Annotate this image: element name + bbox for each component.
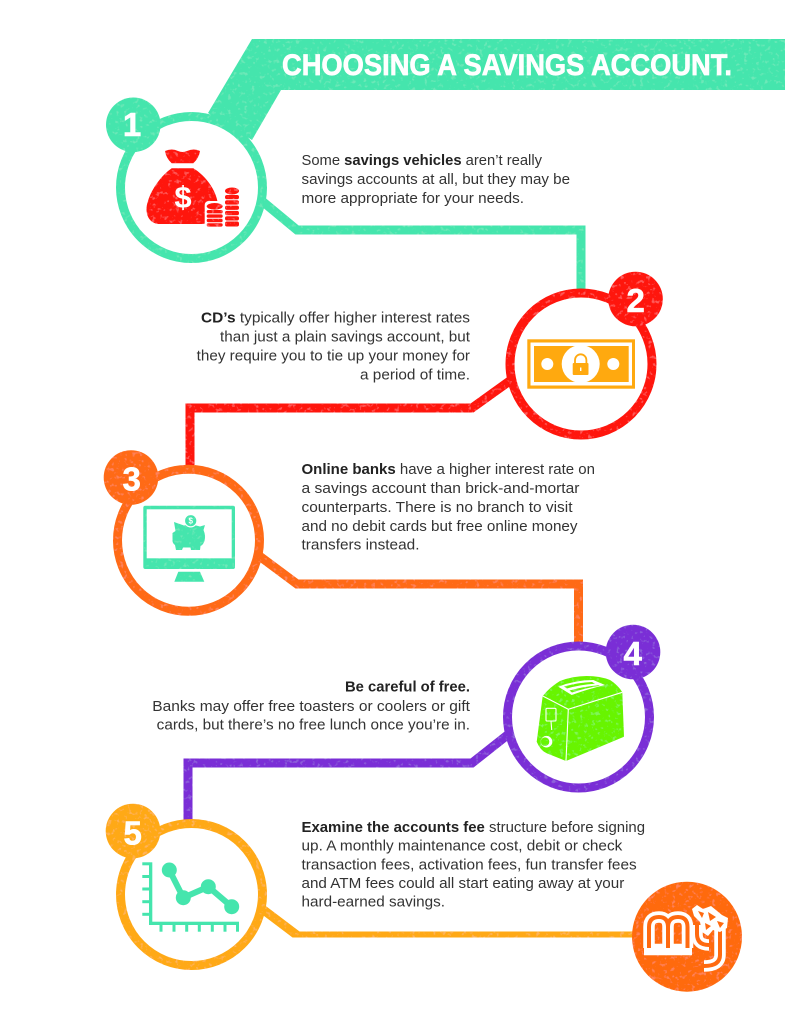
text: step 3: and no debit cards but free online money bbox=[302, 519, 578, 535]
icon: monitor with piggy bank: $ bbox=[188, 516, 193, 526]
text: step 2: they require you to tie up your money for bbox=[197, 348, 470, 364]
step 5 ring and badge bbox=[106, 804, 262, 966]
text: step 3 bbox=[302, 462, 595, 554]
connector: step 3 to step 4 bbox=[258, 555, 578, 646]
icon: banknote with padlock bbox=[527, 339, 635, 389]
connector: step 4 to step 5 bbox=[188, 733, 510, 824]
step 4 ring and badge: 4 bbox=[624, 635, 643, 672]
text: step 4: Banks may offer free toasters or coolers or gift bbox=[152, 699, 470, 715]
title: CHOOSING A SAVINGS ACCOUNT. bbox=[282, 49, 732, 82]
text: step 1: savings accounts at all, but they may be bbox=[302, 172, 570, 188]
title banner bbox=[208, 39, 785, 140]
text: step 5: and ATM fees could all start eating away at your bbox=[302, 876, 624, 892]
text: step 5: transaction fees, activation fees, fun transfer fees bbox=[302, 857, 637, 873]
step 1 ring and badge: 1 bbox=[123, 106, 141, 143]
step 4 ring and badge bbox=[508, 625, 660, 788]
connector: step 2 to step 3 bbox=[190, 380, 511, 470]
step 1 ring and badge bbox=[106, 98, 262, 258]
connector: step 5 to logo bbox=[261, 908, 645, 936]
text: step 5 bbox=[302, 820, 645, 910]
text: step 2: than just a plain savings account, but bbox=[220, 330, 470, 346]
step 3 ring and badge: 3 bbox=[123, 460, 141, 498]
text: step 5: Examine the accounts fee structure before signing bbox=[302, 820, 645, 836]
text: step 4: Be careful of free. bbox=[345, 680, 470, 696]
text: step 4 bbox=[152, 680, 470, 734]
step 2 ring and badge: 2 bbox=[627, 282, 645, 319]
text: step 3: counterparts. There is no branch to visit bbox=[302, 500, 572, 516]
text: step 2: a period of time. bbox=[360, 368, 470, 384]
step 5 ring and badge: 5 bbox=[124, 814, 142, 851]
text: step 1: more appropriate for your needs. bbox=[302, 191, 524, 207]
step 3 ring and badge bbox=[104, 450, 260, 611]
icon: money bag with coins bbox=[146, 150, 241, 229]
icon: money bag with coins: $ bbox=[174, 180, 192, 214]
icon: toaster bbox=[537, 676, 624, 761]
text: step 3: Online banks have a higher interest rate on bbox=[302, 462, 595, 478]
text: step 5: up. A monthly maintenance cost, debit or check bbox=[302, 838, 623, 854]
icon: declining line chart bbox=[142, 862, 239, 932]
text: step 2: CD’s typically offer higher interest rates bbox=[201, 310, 470, 326]
connector: step 1 to step 2 bbox=[262, 201, 581, 292]
text: step 5: hard-earned savings. bbox=[302, 894, 445, 910]
text: step 3: transfers instead. bbox=[302, 538, 420, 554]
text: step 1 bbox=[302, 153, 570, 207]
text: step 1: Some savings vehicles aren’t really bbox=[302, 153, 543, 169]
text: step 2 bbox=[197, 310, 470, 384]
logo: my badge bbox=[632, 882, 742, 992]
text: step 3: a savings account than brick-and-mortar bbox=[302, 481, 580, 497]
text: step 4: cards, but there’s no free lunch once you’re in. bbox=[157, 718, 470, 734]
step 2 ring and badge bbox=[510, 272, 663, 435]
icon: monitor with piggy bank bbox=[143, 506, 235, 582]
